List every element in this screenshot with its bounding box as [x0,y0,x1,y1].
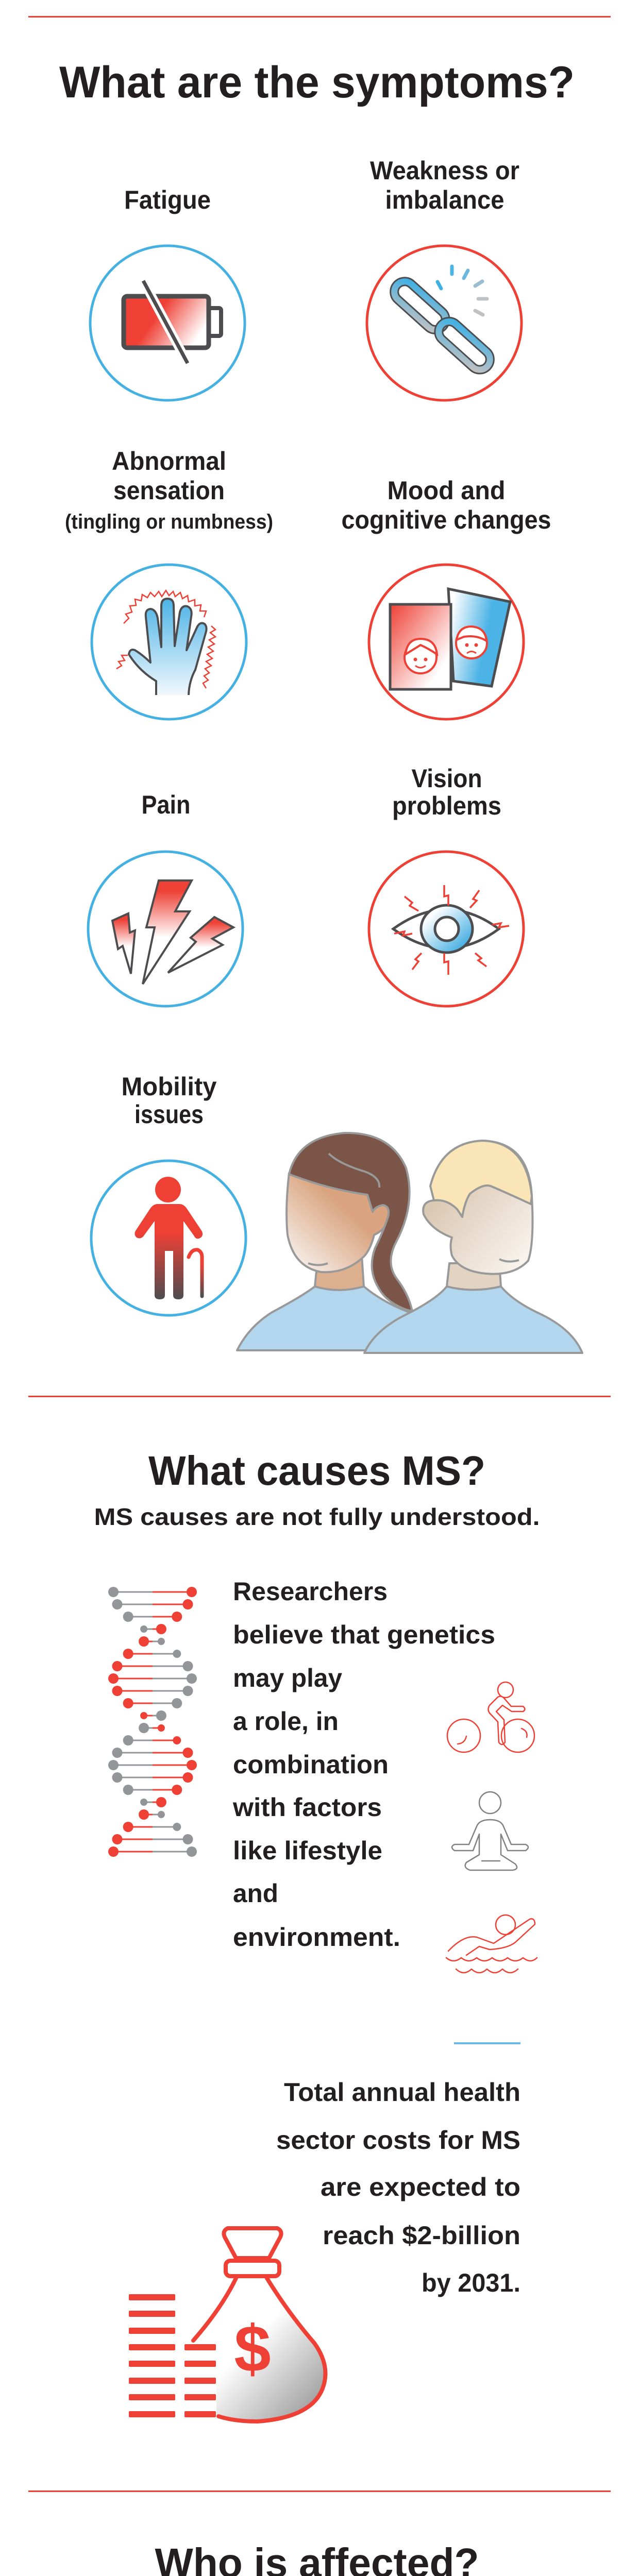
symptom: pain: Pain [141,790,191,819]
symptom: fatigue [90,185,245,400]
icon: money bag and coins: $ [234,2312,271,2386]
symptom: abnormal sensation: sensation [113,476,225,505]
symptom: vision [369,764,524,1006]
icon: lightning bolts [88,852,243,1006]
symptom: mobility: Mobility [122,1072,217,1101]
text: health costs: sector costs for MS [276,2126,520,2155]
heading: what causes MS: What causes MS? [148,1448,485,1494]
accent line: blue above costs [454,2042,520,2044]
symptom: vision: problems [392,791,501,820]
text: health costs: by 2031. [422,2268,520,2297]
text: researchers paragraph: a role, in [233,1707,339,1736]
icon: tingling hand [92,565,246,719]
symptom: weakness [367,156,522,400]
heading: what causes MS: MS causes are not fully understood. [94,1503,540,1530]
symptom: abnormal sensation: (tingling or numbness) [65,511,273,533]
divider: affected [28,2490,611,2492]
symptom: mobility [91,1072,246,1315]
symptom: vision: Vision [411,764,482,793]
symptom: mobility: issues [134,1100,204,1129]
icon: two faces cards [369,565,524,719]
title: symptoms: What are the symptoms? [59,58,575,107]
text: health costs: are expected to [321,2173,520,2201]
symptom: mood and cognitive: Mood and [388,476,505,505]
icon: person with cane [91,1161,246,1315]
symptom: abnormal sensation [65,447,273,719]
illustration: two people [237,1133,582,1353]
text: researchers paragraph: with factors [232,1793,382,1822]
icon: cyclist [447,1682,534,1752]
text: researchers paragraph: Researchers [233,1577,388,1606]
icon: meditation [452,1792,528,1870]
person: man blonde hair [364,1141,582,1353]
text: health costs: reach $2-billion [323,2221,520,2250]
divider: top [28,16,611,18]
symptom: pain [88,790,243,1006]
icon: broken chain in red circle [367,246,522,400]
symptom: mood and cognitive: cognitive changes [341,505,551,534]
icon: swimmer [446,1915,537,1973]
text: researchers paragraph: may play [233,1664,342,1692]
text: health costs [276,2078,520,2297]
text: researchers paragraph: believe that genetics [233,1620,495,1649]
person: woman brown hair [237,1133,450,1350]
symptom: weakness: imbalance [385,185,504,214]
text: researchers paragraph: like lifestyle [233,1836,382,1865]
text: researchers paragraph: and [233,1879,278,1908]
symptom: weakness: Weakness or [370,156,519,185]
icon: battery in blue circle [90,246,245,400]
text: researchers paragraph: combination [233,1750,389,1779]
text: researchers paragraph: environment. [233,1923,400,1952]
icon: eye [369,852,524,1006]
symptom: fatigue: Fatigue [124,185,211,214]
heading: what causes MS [94,1448,540,1530]
text: health costs: Total annual health [284,2078,520,2107]
icon: DNA helix [108,1587,197,1857]
symptom: mood and cognitive [341,476,551,719]
divider: causes [28,1396,611,1397]
symptom: abnormal sensation: Abnormal [112,447,226,476]
text: researchers paragraph [232,1577,495,1952]
icon: money bag and coins [129,2228,325,2421]
